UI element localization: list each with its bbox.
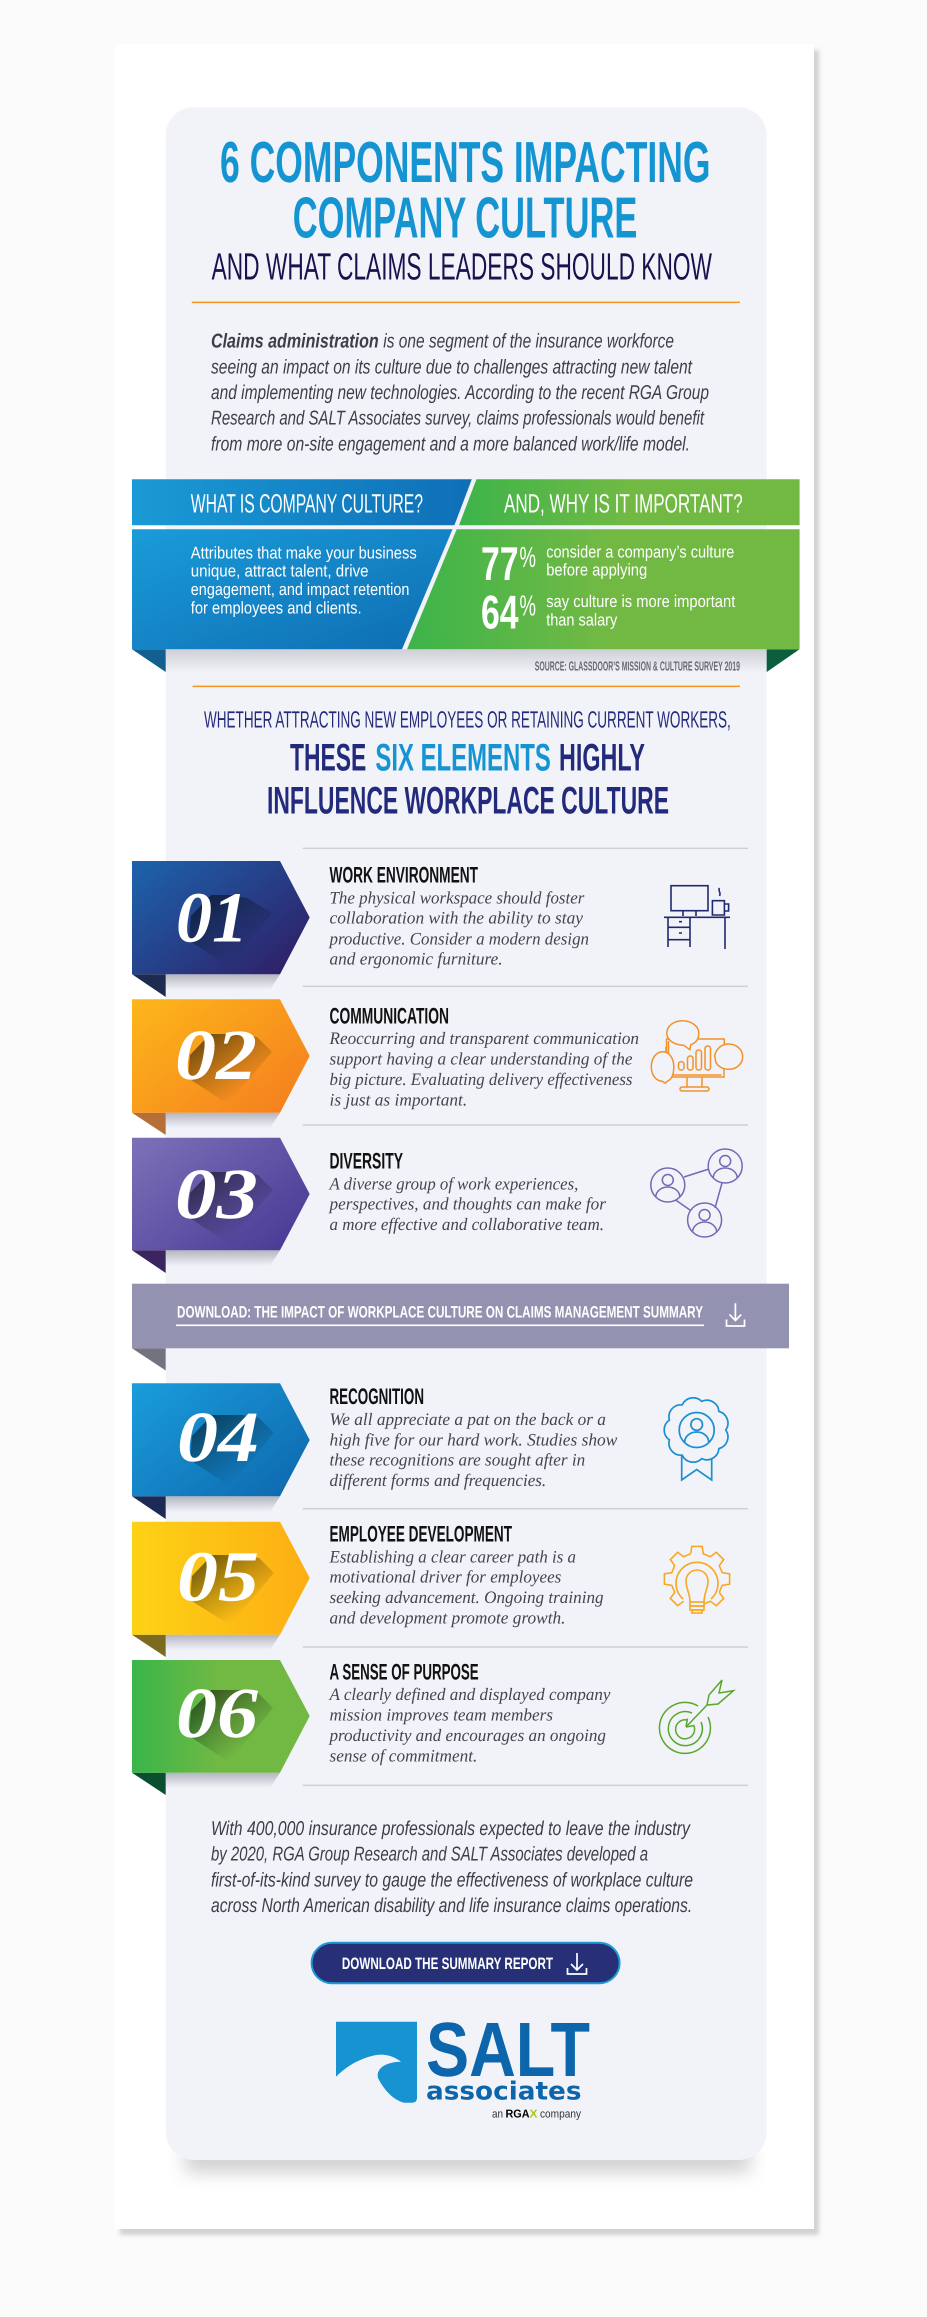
item 02 text [329, 1003, 639, 1109]
icon: gear with light bulb [664, 1546, 730, 1613]
item 06 text [328, 1659, 611, 1765]
badge 04 [132, 1383, 310, 1519]
stat 64 percent: 64 [481, 586, 519, 639]
item 01 text: WORK ENVIRONMENT [330, 863, 478, 888]
item 03 text: perspectives, and thoughts can make for [328, 1194, 606, 1214]
badge 02: 02 [175, 1015, 257, 1095]
source note: SOURCE: GLASSDOOR’S MISSION & CULTURE SURVEY 2019 [535, 659, 740, 674]
what is body [132, 529, 452, 649]
item 01 text [328, 863, 589, 969]
item 04 text: these recognitions are sought after in [330, 1450, 585, 1470]
logo tagline: X [530, 2108, 538, 2120]
item 06 text: A SENSE OF PURPOSE [330, 1659, 479, 1684]
stat 77 percent [481, 538, 734, 591]
closing paragraph: With 400,000 insurance professionals expected to leave the industry [211, 1818, 691, 1840]
definition text [191, 543, 417, 617]
item 05 text: motivational driver for employees [330, 1567, 561, 1587]
icon: download arrow [726, 1303, 744, 1326]
icon: target with arrow [659, 1680, 734, 1753]
item 05 text: EMPLOYEE DEVELOPMENT [330, 1521, 512, 1546]
definition text: Attributes that make your business [191, 543, 417, 562]
intro paragraph: is one segment of the insurance workforce [383, 331, 674, 353]
item 02 text: big picture. Evaluating delivery effectiveness [330, 1069, 633, 1089]
heading line 2: INFLUENCE WORKPLACE CULTURE [267, 779, 669, 822]
item 06 text: mission improves team members [330, 1705, 553, 1725]
download button [312, 1943, 620, 1983]
badge 06: 06 [176, 1673, 258, 1753]
definition text: for employees and clients. [191, 598, 362, 617]
title line 2: COMPANY CULTURE [293, 185, 637, 250]
badge 03 [132, 1138, 310, 1273]
fold right [767, 649, 800, 672]
item 03 text: A diverse group of work experiences, [329, 1173, 578, 1193]
item 04 text [330, 1384, 618, 1490]
intro paragraph [211, 331, 709, 455]
item 02 text: is just as important. [330, 1089, 467, 1109]
badge 06 [132, 1660, 310, 1795]
closing paragraph: across North American disability and life insurance claims operations. [211, 1895, 692, 1917]
intro paragraph: seeing an impact on its culture due to challenges attracting new talent [211, 356, 693, 378]
intro paragraph: from more on-site engagement and a more balanced work/life model. [211, 433, 690, 455]
section heading [204, 707, 731, 822]
badge 02 [132, 999, 310, 1135]
item 04 text: different forms and frequencies. [330, 1470, 546, 1490]
icon: desk [664, 886, 730, 949]
item 01 text: collaboration with the ability to stay [330, 908, 583, 928]
item 04 text: RECOGNITION [330, 1384, 424, 1409]
item 04 text: We all appreciate a pat on the back or a [330, 1409, 606, 1429]
download bar [132, 1284, 789, 1370]
stat 77 percent: % [520, 542, 536, 574]
why body [407, 529, 800, 649]
download button: DOWNLOAD THE SUMMARY REPORT [342, 1955, 553, 1973]
definition text: unique, attract talent, drive [191, 562, 368, 581]
white card [115, 44, 814, 2229]
why heading bar [459, 479, 800, 525]
item 03 text [328, 1149, 606, 1234]
closing paragraph: by 2020, RGA Group Research and SALT Associates developed a [211, 1844, 648, 1866]
item 02 text: COMMUNICATION [330, 1003, 449, 1028]
item 05 text: seeking advancement. Ongoing training [330, 1587, 604, 1607]
item 03 text: DIVERSITY [330, 1149, 403, 1174]
item 02 text: support having a clear understanding of the [330, 1048, 633, 1068]
stat 77 percent: 77 [481, 538, 519, 591]
what is heading bar [132, 479, 472, 525]
inner panel shadow [185, 2146, 750, 2172]
item 05 text: and development promote growth. [330, 1607, 566, 1627]
culture band [132, 479, 800, 673]
title [212, 130, 712, 288]
why heading: AND, WHY IS IT IMPORTANT? [504, 489, 743, 519]
intro paragraph: and implementing new technologies. According to the recent RGA Group [211, 382, 709, 404]
icon: download arrow [568, 1953, 586, 1974]
logo wordmark: SALT [426, 2007, 590, 2093]
inner panel [166, 107, 767, 2160]
item 05 text: Establishing a clear career path is a [329, 1546, 576, 1566]
heading line 1: HIGHLY [559, 737, 645, 780]
item 06 text: productivity and encourages an ongoing [328, 1725, 606, 1745]
logo associates: associates [426, 2076, 582, 2105]
closing paragraph: first-of-its-kind survey to gauge the effectiveness of workplace culture [211, 1869, 693, 1891]
band shadow [166, 649, 767, 673]
icon: award rosette [664, 1398, 728, 1480]
logo wave mark [336, 2022, 417, 2103]
item 01 text: The physical workspace should foster [330, 887, 584, 907]
intro paragraph: Claims administration [211, 331, 379, 353]
item 01 text: and ergonomic furniture. [330, 949, 503, 969]
stat 64 percent: say culture is more important [546, 592, 736, 611]
heading line 1: SIX ELEMENTS [375, 737, 551, 780]
card drop shadow [120, 50, 819, 2235]
intro paragraph: Research and SALT Associates survey, claims professionals would benefit [211, 408, 705, 430]
stat 64 percent: % [520, 590, 536, 622]
badge 01 [132, 861, 310, 997]
logo tagline: an [492, 2108, 503, 2120]
badge 04: 04 [177, 1397, 259, 1477]
badge 05 [132, 1522, 310, 1657]
item 02 text: Reoccurring and transparent communication [329, 1028, 639, 1048]
item 05 text [329, 1521, 604, 1627]
item 06 text: A clearly defined and displayed company [329, 1684, 611, 1704]
definition text: engagement, and impact retention [191, 580, 409, 599]
logo: SALT associates [336, 2007, 590, 2120]
stat 77 percent: consider a company’s culture [546, 542, 734, 561]
item 06 text: sense of commitment. [330, 1745, 477, 1765]
bar background [132, 1284, 789, 1348]
what is heading: WHAT IS COMPANY CULTURE? [191, 489, 423, 519]
closing paragraph [211, 1818, 693, 1917]
icon: presentation with speech bubbles [651, 1021, 743, 1091]
stat 64 percent [481, 586, 736, 639]
badge 01: 01 [176, 878, 248, 958]
fold left [132, 649, 166, 672]
logo tagline: company [540, 2108, 581, 2120]
download link text: DOWNLOAD: THE IMPACT OF WORKPLACE CULTURE ON CLAIMS MANAGEMENT SUMMARY [177, 1303, 703, 1321]
item 01 text: productive. Consider a modern design [328, 928, 589, 948]
bar fold [132, 1348, 166, 1370]
logo tagline [492, 2108, 581, 2120]
heading line 1: THESE [290, 737, 366, 780]
item 03 text: a more effective and collaborative team. [330, 1214, 604, 1234]
logo tagline: RGA [506, 2108, 530, 2120]
badge 03: 03 [175, 1154, 258, 1234]
stat 64 percent: than salary [546, 610, 618, 629]
icon: connected people [651, 1149, 742, 1237]
stat 77 percent: before applying [546, 561, 647, 580]
badge 05: 05 [177, 1536, 259, 1616]
item 04 text: high five for our hard work. Studies show [330, 1429, 618, 1449]
